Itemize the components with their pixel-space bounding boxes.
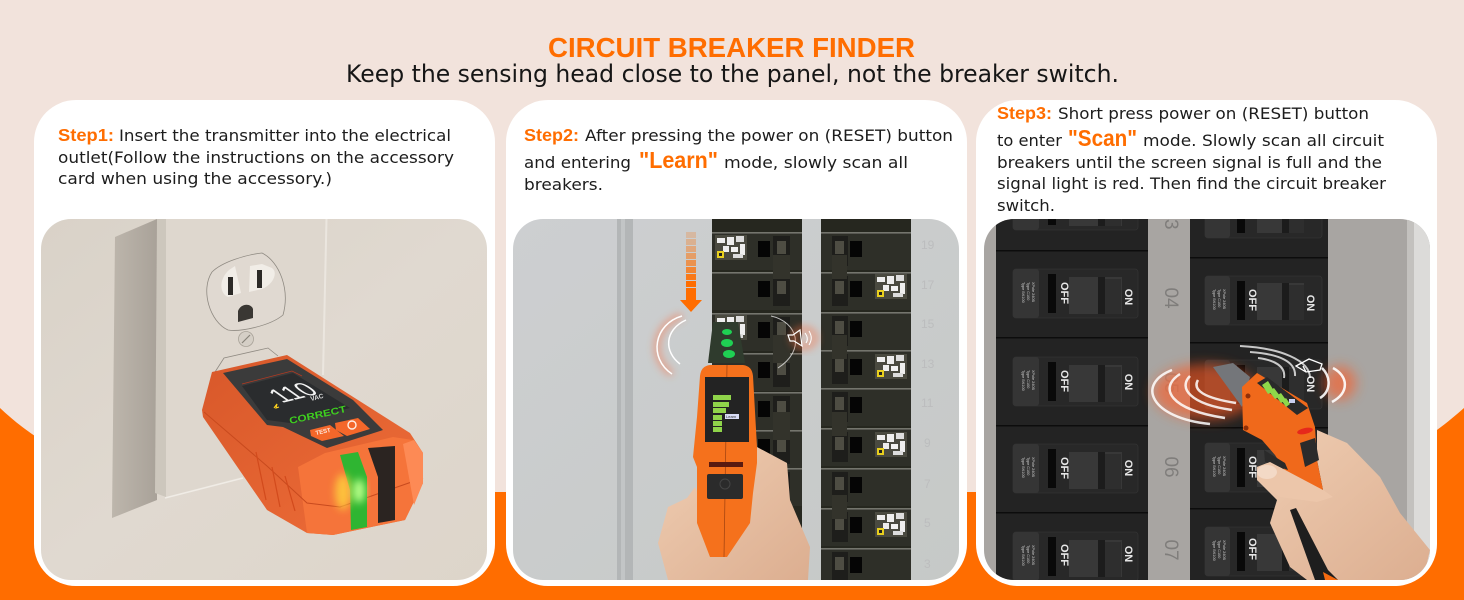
step 3 text: switch. — [997, 196, 1055, 215]
breaker units right column — [1205, 189, 1322, 576]
step 1 text: card when using the accessory.) — [58, 169, 332, 188]
strip numbers: 04 — [1160, 287, 1181, 309]
breaker units right column: Type BK100 — [1212, 540, 1216, 561]
photo: scanning breakers in learn mode: 5 — [924, 516, 931, 530]
breaker units left column: OFF — [1058, 457, 1070, 479]
step 2 text: "Learn" — [639, 147, 718, 173]
subtitle: Keep the sensing head close to the panel, not the breaker switch. — [346, 60, 1119, 88]
step 3 text: Step3: — [997, 103, 1052, 123]
strip numbers — [1165, 220, 1178, 560]
signal waves — [1152, 346, 1356, 424]
breaker units right column: XPole 240B — [1222, 289, 1226, 310]
photo: scanning breakers in learn mode: 11 — [921, 396, 934, 410]
breaker units left column: Type C100 — [1026, 282, 1030, 300]
strip numbers: 05 — [1160, 372, 1181, 394]
breaker units right column: Type BK100 — [1212, 456, 1216, 477]
breaker units left column: XPole 240B — [1031, 545, 1035, 566]
title: CIRCUIT BREAKER FINDER — [548, 32, 915, 63]
step 3 text: breakers until the screen signal is full and the — [997, 153, 1382, 172]
tester handle and thumb — [1257, 462, 1338, 580]
strip numbers: 03 — [1160, 208, 1181, 230]
card background — [976, 100, 1437, 586]
photo: scanning breakers in scan mode — [984, 181, 1430, 581]
panel: step 3 — [976, 100, 1437, 586]
hand — [1257, 430, 1430, 580]
photo: scanning breakers in learn mode: 7 — [924, 477, 931, 491]
breaker units right column: OFF — [1246, 289, 1258, 311]
step 2 text: After pressing the power on (RESET) button — [585, 126, 953, 145]
step 3 text: to enter — [997, 131, 1062, 150]
breaker units left column: Type BK100 — [1021, 457, 1025, 478]
breaker units left column: Type C100 — [1026, 457, 1030, 475]
panel: step 1 — [34, 100, 495, 586]
tester — [1213, 363, 1323, 495]
photo: scanning breakers in learn mode: 19 — [921, 238, 935, 252]
card background — [506, 100, 967, 586]
breaker units left column: XPole 240B — [1031, 370, 1035, 391]
step 2 text: mode, slowly scan all — [724, 153, 908, 172]
button: power — [335, 418, 370, 436]
photo: scanning breakers in learn mode — [513, 219, 959, 586]
arrow: scan down — [680, 232, 702, 312]
step 2 text — [524, 125, 953, 194]
signal waves — [657, 316, 815, 374]
hand — [658, 447, 810, 580]
step 1 text — [58, 125, 454, 188]
step 1 text: Insert the transmitter into the electrical — [119, 126, 451, 145]
card background — [34, 100, 495, 586]
photo: scanning breakers in learn mode: 17 — [921, 278, 935, 292]
panel: step 2 — [506, 100, 967, 586]
breaker units left column: XPole 240B — [1031, 457, 1035, 478]
breaker units right column: Type C100 — [1217, 456, 1221, 474]
breaker units left column: OFF — [1058, 544, 1070, 566]
breaker units left column: OFF — [1058, 370, 1070, 392]
step 2 text: Step2: — [524, 125, 579, 145]
photo: scanning breakers in learn mode: 3 — [924, 557, 931, 571]
photo: scanning breakers in learn mode: 9 — [924, 436, 931, 450]
step 2 text: breakers. — [524, 175, 603, 194]
device: CORRECT — [288, 404, 348, 427]
breaker units right column: ON — [1304, 376, 1316, 392]
breaker units left column: ON — [1122, 460, 1134, 476]
device — [202, 355, 423, 535]
tester: Learn — [726, 414, 736, 419]
step 3 text: Short press power on (RESET) button — [1058, 104, 1369, 123]
breaker units left column: ON — [1122, 374, 1134, 390]
step 3 text: signal light is red. Then find the circuit breaker — [997, 174, 1386, 193]
breaker units right column: Type BK100 — [1212, 289, 1216, 310]
breaker units left column: Type C100 — [1026, 545, 1030, 563]
step 3 text — [997, 103, 1386, 215]
tester — [693, 322, 757, 557]
strip numbers: 06 — [1160, 456, 1181, 478]
breaker units left column: XPole 240B — [1031, 282, 1035, 303]
step 3 text: mode. Slowly scan all circuit — [1143, 131, 1384, 150]
photo: transmitter plugged into outlet — [41, 219, 487, 580]
breaker units left column: OFF — [1058, 282, 1070, 304]
breaker units right column: OFF — [1246, 456, 1258, 478]
breaker units right column: XPole 240B — [1222, 540, 1226, 561]
breaker units left column — [1013, 181, 1138, 581]
step 1 text: Step1: — [58, 125, 114, 145]
device: 110 — [260, 378, 326, 407]
breaker units left column: Type BK100 — [1021, 282, 1025, 303]
step 3 text: "Scan" — [1068, 125, 1137, 151]
button: test: TEST — [315, 428, 332, 437]
breaker units left column: Type BK100 — [1021, 370, 1025, 391]
breaker units left column: ON — [1122, 546, 1134, 562]
breaker units right column: Type C100 — [1217, 289, 1221, 307]
photo: scanning breakers in learn mode: 13 — [921, 357, 935, 371]
breaker units left column: Type BK100 — [1021, 545, 1025, 566]
strip numbers: 07 — [1160, 539, 1181, 561]
breaker units left column: Type C100 — [1026, 370, 1030, 388]
breaker units right column: XPole 240B — [1222, 456, 1226, 477]
device: VAC — [310, 393, 325, 403]
breaker units right column: ON — [1304, 295, 1316, 311]
breaker units right column: OFF — [1246, 538, 1258, 560]
button: test — [310, 425, 344, 441]
breaker units left column: ON — [1122, 289, 1134, 305]
step 1 text: outlet(Follow the instructions on the accessory — [58, 148, 454, 167]
step 2 text: and entering — [524, 153, 631, 172]
photo: scanning breakers in learn mode: 15 — [921, 317, 935, 331]
breaker units right column: Type C100 — [1217, 540, 1221, 558]
